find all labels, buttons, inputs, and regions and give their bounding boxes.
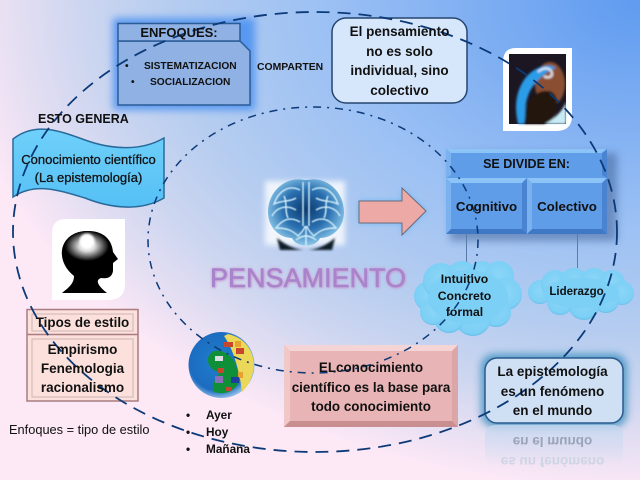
- text: cloud intuitivo: Concreto: [438, 288, 491, 302]
- heading: esto genera: ESTO GENERA: [38, 112, 129, 126]
- list: ayer hoy mañana: Mañana: [206, 442, 250, 456]
- panel: se divide en: [446, 149, 617, 241]
- text: tipos de estilo: Tipos de estilo: [36, 315, 129, 330]
- text: conocimiento base: [292, 360, 450, 414]
- text: pensamiento colectivo: El pensamiento: [350, 24, 449, 39]
- text: conocimiento base: ELconocimiento: [319, 360, 423, 375]
- text: estilos: [41, 342, 124, 395]
- text: conocimiento base: científico es la base para: [292, 380, 450, 394]
- text: estilos: Empirismo: [48, 342, 117, 357]
- text: banner: Conocimiento científico: [21, 152, 156, 167]
- brain image: [265, 179, 345, 250]
- banner: conocimiento científico: [13, 129, 164, 207]
- text: banner: [21, 152, 156, 185]
- list: enfoques: SISTEMATIZACION: [144, 61, 237, 72]
- panel: tipos de estilo: [27, 310, 138, 401]
- inner dash-dot ellipse: [148, 107, 478, 373]
- text: cloud liderazgo: Liderazgo: [549, 286, 604, 298]
- text: cloud intuitivo: Intuitivo: [441, 272, 488, 286]
- list: ayer hoy mañana: [186, 408, 250, 456]
- list: enfoques: •: [131, 77, 135, 88]
- text: conocimiento base: todo conocimiento: [311, 399, 431, 414]
- text: la epistemología: [497, 364, 608, 418]
- list: ayer hoy mañana: •: [186, 408, 190, 422]
- panel: pensamiento colectivo: [332, 18, 467, 103]
- label: cognitivo: Cognitivo: [456, 199, 517, 214]
- reflection of panel: es un fenómeno: [501, 454, 604, 469]
- icon: globe: [188, 332, 254, 398]
- text: estilos: Fenemologia: [41, 361, 124, 376]
- icon: head with light bulb: [52, 219, 125, 300]
- icon: head with question mark: [503, 48, 572, 131]
- text: estilos: racionalismo: [41, 380, 124, 395]
- cloud: intuitivo: [414, 261, 522, 336]
- text: pensamiento colectivo: individual, sino: [350, 63, 449, 78]
- text: la epistemología: La epistemología: [497, 364, 608, 379]
- text: enfoques igual tipo de estilo: Enfoques = tipo de estilo: [9, 422, 150, 437]
- text: pensamiento colectivo: colectivo: [370, 82, 429, 98]
- heading: se divide en: SE DIVIDE EN:: [483, 157, 570, 171]
- cloud: liderazgo: [528, 268, 634, 320]
- list: enfoques: •: [125, 61, 129, 72]
- reflection of panel: [485, 425, 623, 469]
- text: la epistemología: en el mundo: [513, 403, 592, 418]
- text: pensamiento colectivo: [350, 24, 449, 98]
- text: banner: (La epistemología): [35, 170, 142, 185]
- reflection of panel: en el mundo: [513, 434, 592, 449]
- connector lines: [466, 234, 578, 268]
- arrow: [359, 188, 426, 235]
- heading: enfoques: ENFOQUES:: [140, 25, 218, 40]
- panel: enfoques: [113, 18, 255, 110]
- label: comparten: COMPARTEN: [257, 62, 323, 73]
- label: colectivo: Colectivo: [537, 199, 597, 214]
- text: cloud intuitivo: formal: [446, 305, 483, 319]
- text: pensamiento colectivo: no es solo: [366, 44, 433, 58]
- list: enfoques: [125, 61, 237, 88]
- list: ayer hoy mañana: •: [186, 425, 190, 439]
- text: la epistemología: es un fenómeno: [501, 384, 604, 398]
- title: pensamiento: PENSAMIENTO: [210, 263, 406, 293]
- list: ayer hoy mañana: •: [186, 442, 190, 456]
- list: ayer hoy mañana: Ayer: [206, 408, 232, 422]
- panel: la epistemología glow: [481, 354, 627, 427]
- text: cloud intuitivo: [438, 272, 491, 319]
- list: ayer hoy mañana: Hoy: [206, 425, 228, 439]
- panel: conocimiento base: [284, 345, 458, 427]
- list: enfoques: SOCIALIZACION: [150, 77, 230, 88]
